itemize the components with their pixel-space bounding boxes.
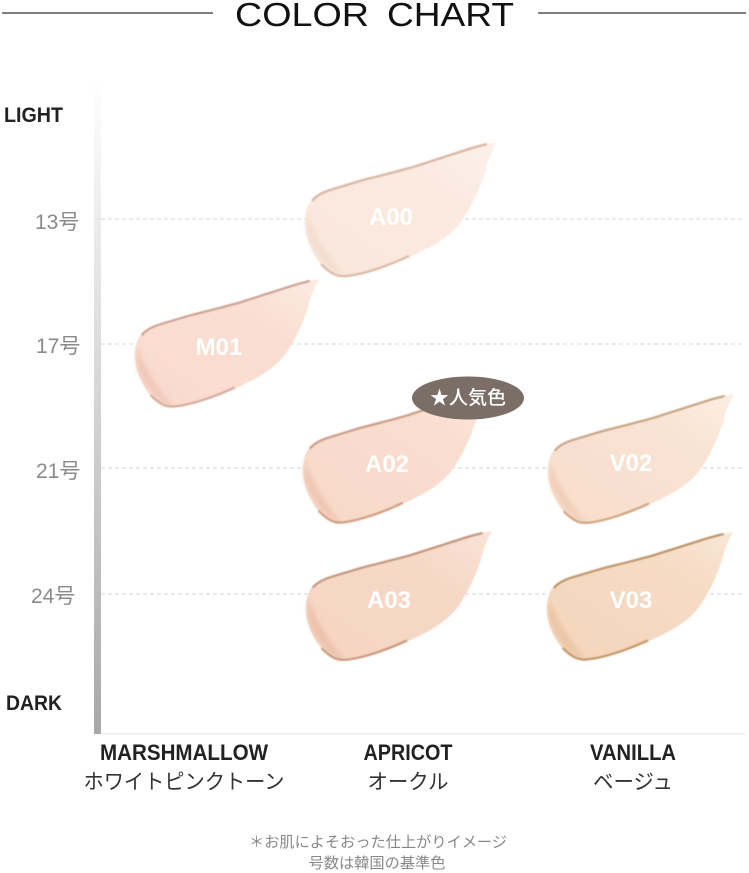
column label: vanilla [590,740,676,794]
shade number labels [31,211,80,608]
swatch: M01 [135,279,319,407]
column label: marshmallow: ホワイトピンクトーン [84,771,284,794]
swatch: A03 [306,531,492,661]
footnote: ＊お肌によそおった仕上がりイメージ [249,834,507,851]
column label: apricot: APRICOT [364,740,453,765]
swatch: A03: A03 [367,587,411,614]
shade number labels: 24号 [31,585,75,608]
shade number labels: 13号 [35,211,79,234]
axis label: dark: DARK [6,692,62,715]
swatch: A02 [303,391,487,523]
column label: vanilla: ベージュ [593,771,673,794]
column label: apricot [364,740,453,794]
axis label: light: LIGHT [4,104,63,127]
footnote [249,834,507,872]
shade number labels: 21号 [36,460,80,483]
badge: popular color: ★人気色 [430,387,506,409]
column label: apricot: オークル [368,771,448,794]
title [2,0,746,34]
swatch: V02 [548,394,734,524]
swatch: A02: A02 [365,451,409,478]
shade grid lines [101,219,742,594]
footnote: 号数は韓国の基準色 [308,855,446,872]
swatch: A00 [305,142,497,277]
chart axis [94,80,745,735]
shade number labels: 17号 [36,335,80,358]
swatch: M01: M01 [196,334,242,361]
badge: popular color [412,376,524,420]
swatch: V03: V03 [610,587,652,614]
column label: marshmallow [84,740,284,794]
swatch: V02: V02 [610,450,652,477]
column label: vanilla: VANILLA [590,740,676,765]
swatch: A00: A00 [369,204,413,231]
column label: marshmallow: MARSHMALLOW [100,740,268,765]
swatch: V03 [547,532,733,660]
